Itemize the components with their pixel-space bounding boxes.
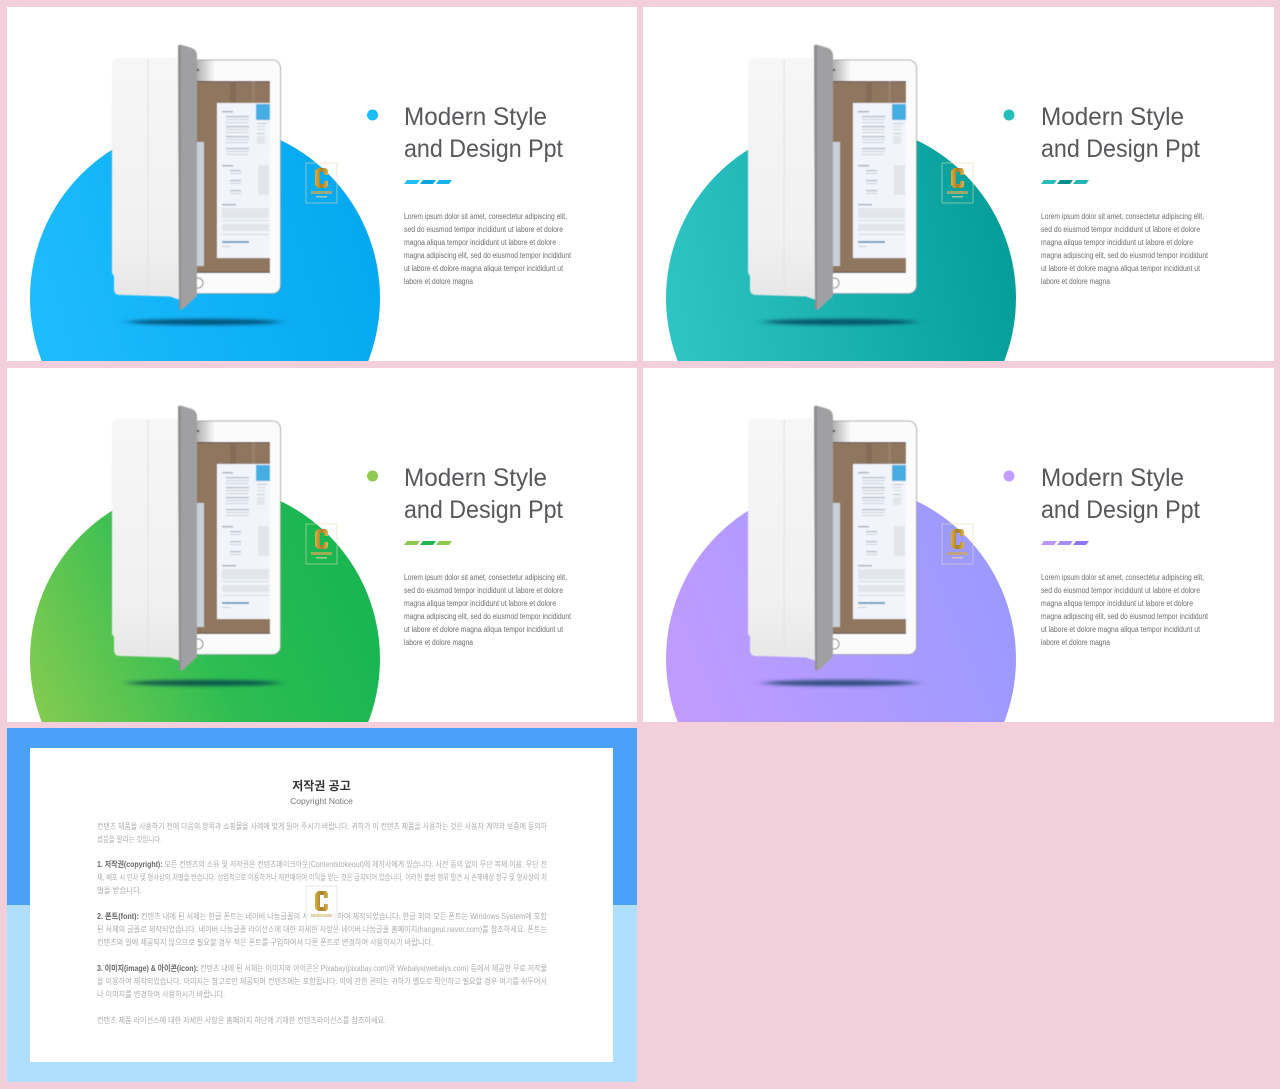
closing line: 컨텐츠 제품 라이선스에 대한 자세한 사항은 홈페이지 하단에 기재한 컨텐츠라이선스를 참조하세요.	[97, 1015, 386, 1025]
panel: blue slide	[7, 7, 637, 361]
notice subtitle: Copyright Notice	[290, 796, 353, 806]
body text: labore et dolore magna	[1041, 277, 1110, 286]
bullet dot	[1004, 470, 1014, 482]
body text	[404, 573, 572, 647]
bullet dot	[367, 110, 378, 120]
clause 1 copyright	[97, 859, 547, 895]
body text: Lorem ipsum dolor sit amet, consectetur adipiscing elit,	[404, 212, 567, 221]
heading	[404, 464, 563, 524]
body text: magna adipiscing elit, sed do eiusmod tempor incididunt	[404, 251, 572, 260]
tablet with folded cover	[112, 45, 280, 325]
body text: magna adipiscing elit, sed do eiusmod tempor incididunt	[1041, 612, 1209, 621]
heading: Modern Style	[1041, 103, 1184, 131]
body text	[404, 212, 572, 286]
body text: Lorem ipsum dolor sit amet, consectetur adipiscing elit,	[404, 573, 567, 582]
body text: ut labore et dolore magna aliqua tempor incididunt ut	[404, 264, 564, 273]
clause 2 font: 된 서체의 글꼴로 제작되었습니다. 네이버 나눔글꼴 라이선스에 대한 자세한 사항은 네이버 나눔글꼴 홈페이지(hangeul.naver.com)를 참조하세요. 폰트는	[97, 924, 547, 934]
clause 1 copyright: 벌을 받습니다.	[97, 885, 142, 895]
accent bars	[1041, 541, 1089, 545]
notice intro	[97, 821, 548, 844]
clause 1 copyright: 1. 저작권(copyright): 모든 컨텐츠의 소유 및 저작권은 컨텐츠메이크아웃(Contentstokeout)에 제작사에게 있습니다. 사전 동의 없이 무단 복제 이용, 무단 전	[97, 859, 547, 869]
bullet dot	[367, 470, 378, 482]
body text: sed do eiusmod tempor incididunt ut labore et dolore	[1041, 586, 1200, 595]
accent bars	[404, 541, 452, 545]
body text: magna aliqua tempor incididunt ut labore et dolore	[1041, 599, 1193, 608]
heading: and Design Ppt	[404, 496, 563, 524]
body text: magna aliqua tempor incididunt ut labore et dolore	[404, 238, 556, 247]
watermark logo	[306, 886, 337, 926]
purple gradient circle	[666, 501, 1016, 722]
body text: Lorem ipsum dolor sit amet, consectetur adipiscing elit,	[1041, 212, 1204, 221]
clause 3 image and icon: 나 이미지를 변경하여 사용하시기 바랍니다.	[97, 989, 225, 999]
clause 3 image and icon	[97, 963, 547, 999]
watermark logo	[942, 524, 973, 564]
heading	[404, 103, 563, 163]
watermark logo	[942, 163, 973, 203]
body text: magna aliqua tempor incididunt ut labore et dolore	[404, 599, 556, 608]
body text: ut labore et dolore magna aliqua tempor incididunt ut	[404, 625, 564, 634]
heading	[1041, 464, 1200, 524]
heading: and Design Ppt	[404, 135, 563, 163]
body text: magna adipiscing elit, sed do eiusmod tempor incididunt	[404, 612, 572, 621]
body text	[1041, 212, 1209, 286]
body text: ut labore et dolore magna aliqua tempor incididunt ut	[1041, 625, 1201, 634]
tablet with folded cover	[748, 406, 916, 686]
tablet with folded cover	[112, 406, 280, 686]
notice intro: 셨음을 알리는 것입니다.	[97, 834, 162, 844]
heading: Modern Style	[404, 103, 547, 131]
heading: Modern Style	[1041, 464, 1184, 492]
notice title: 저작권 공고	[292, 778, 351, 793]
watermark logo	[306, 163, 337, 203]
notice intro: 컨텐츠 제품을 사용하기 전에 다음의 항목과 쇼핑몰을 사례에 맞게 읽어 주시기 바랍니다. 귀하가 이 컨텐츠 제품을 사용하는 것은 사용자 계약과 보증에 동의하	[97, 821, 548, 831]
panel: teal slide	[643, 7, 1274, 361]
body text	[1041, 573, 1209, 647]
clause 3 image and icon: 3. 이미지(image) & 아이콘(icon): 컨텐츠 내에 된 서체는 이미지와 아이콘은 Pixabay(pixabay.com)와 Webalys(webalys.com) 등에서 제공한 무료 저작물	[97, 963, 547, 973]
teal gradient circle	[666, 140, 1016, 361]
body text: labore et dolore magna	[1041, 638, 1110, 647]
body text: Lorem ipsum dolor sit amet, consectetur adipiscing elit,	[1041, 573, 1204, 582]
green gradient circle	[30, 501, 380, 722]
heading: Modern Style	[404, 464, 547, 492]
body text: sed do eiusmod tempor incididunt ut labore et dolore	[404, 225, 563, 234]
bullet dot	[1004, 110, 1014, 120]
blue gradient circle	[30, 140, 380, 361]
panel: purple slide	[643, 368, 1274, 722]
heading: and Design Ppt	[1041, 496, 1200, 524]
body text: ut labore et dolore magna aliqua tempor incididunt ut	[1041, 264, 1201, 273]
tablet with folded cover	[748, 45, 916, 325]
body text: magna aliqua tempor incididunt ut labore et dolore	[1041, 238, 1193, 247]
body text: sed do eiusmod tempor incididunt ut labore et dolore	[404, 586, 563, 595]
clause 2 font: 컨텐츠의 일에 제공되지 않으므로 필요할 경우 적은 폰트를 구입하여서 다른 폰트로 변경하여 사용하시기 바랍니다.	[97, 937, 433, 947]
clause 3 image and icon: 을 이용하여 제작되었습니다. 이미지는 참고로만 제공되며 컨텐츠에는 포함됩니다. 이에 관한 권리는 귀하가 별도로 확인하고 필요할 경우 여기를 쉬두어서	[97, 976, 547, 986]
body text: labore et dolore magna	[404, 277, 473, 286]
accent bars	[404, 180, 452, 184]
clause 2 font: 2. 폰트(font): 컨텐츠 내에 된 서체는 한글 폰트는 네이버 나눔글꼴의 서체를 사용하여 제작되었습니다. 한글 외의 모든 폰트는 Windows System에 포함	[97, 911, 548, 921]
body text: sed do eiusmod tempor incididunt ut labore et dolore	[1041, 225, 1200, 234]
panel: copyright notice	[7, 728, 637, 1082]
clause 2 font	[97, 911, 548, 947]
body text: magna adipiscing elit, sed do eiusmod tempor incididunt	[1041, 251, 1209, 260]
panel: green slide	[7, 368, 637, 722]
clause 1 copyright: 재, 배포 시 민사 및 형사상의 처벌을 받습니다. 상업적으로 이용하거나 재판매하여 이익을 얻는 것은 금지되어 있습니다. 이러한 불법 행위 발견 시 손해배상 청구 및 형사상의 처	[97, 872, 547, 882]
body text: labore et dolore magna	[404, 638, 473, 647]
heading: and Design Ppt	[1041, 135, 1200, 163]
watermark logo	[306, 524, 337, 564]
heading	[1041, 103, 1200, 163]
accent bars	[1041, 180, 1089, 184]
